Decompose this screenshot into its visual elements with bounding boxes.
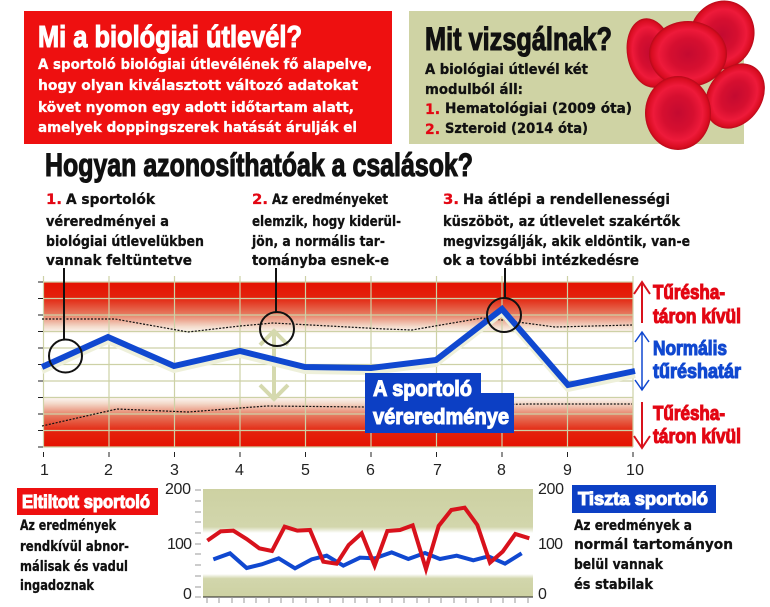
text block: banned athlete description: Az eredmények — [20, 518, 116, 534]
label: out of tolerance, lower — [653, 403, 741, 448]
label: normal tolerance: tűréshatár — [653, 361, 741, 383]
left axis labels: 0 — [183, 586, 192, 603]
text block: modules: Hematológiai (2009 óta) — [445, 101, 632, 117]
text block: step 1: A sportolók — [66, 192, 155, 208]
right axis labels: 200 — [538, 481, 564, 498]
text block: step 1: vannak feltüntetve — [46, 253, 192, 269]
heading: Mi a biológiai útlevél?: Mi a biológiai útlevél? — [38, 19, 302, 54]
text block: clean athlete description: és stabilak — [574, 577, 653, 593]
text block: clean athlete description: Az eredmények a — [574, 518, 692, 534]
x axis labels: 7 — [433, 462, 442, 479]
text block: banned athlete description — [20, 518, 129, 594]
text block: step 1: véreredményei a — [46, 214, 169, 230]
left axis labels — [165, 481, 192, 603]
text block: banned athlete description: málisak és vadul — [20, 559, 128, 575]
label: A sportoló véreredménye: véreredménye — [373, 404, 509, 429]
x axis labels: 9 — [563, 462, 572, 479]
text block: definition: A sportoló biológiai útlevélének fő alapelve, — [38, 57, 372, 73]
panel: clean athlete — [572, 485, 733, 593]
panel: clean athlete: Tiszta sportoló — [578, 489, 708, 509]
callout circle 3 — [487, 268, 521, 332]
x axis labels: 8 — [497, 462, 506, 479]
left axis labels: 200 — [165, 481, 191, 498]
text block: step 2: tományba esnek-e — [252, 253, 389, 269]
blood result line — [42, 309, 635, 389]
heading: how can cheating be identified: Hogyan azonosíthatóak a csalások? — [45, 147, 473, 183]
label: out of tolerance, lower: Tűrésha- — [653, 403, 725, 425]
line chart: athlete blood result — [38, 268, 644, 479]
clean athlete series — [213, 552, 522, 568]
text block: step 2: elemzik, hogy kiderül- — [252, 214, 401, 230]
text block: modules: 2. — [425, 122, 440, 138]
label: A sportoló véreredménye: A sportoló — [373, 376, 472, 401]
text block: banned athlete description: ingadoznak — [20, 578, 94, 594]
text block: step 3: megvizsgálják, akik eldöntik, van-e — [443, 234, 690, 250]
heading: Mit vizsgálnak?: Mit vizsgálnak? — [425, 21, 612, 57]
banned athlete series — [207, 508, 529, 569]
text block: step 1 — [46, 192, 204, 269]
panel: what do they examine — [409, 11, 744, 144]
x axis labels: 6 — [366, 462, 375, 479]
label: out of tolerance, lower: táron kívül — [653, 426, 741, 448]
right axis labels: 100 — [538, 536, 563, 553]
label: A sportoló véreredménye — [365, 373, 514, 433]
right axis labels — [538, 481, 564, 603]
icon: red blood cells — [621, 0, 770, 150]
x axis labels: 10 — [626, 462, 644, 479]
text block: modules: modulból áll: — [425, 82, 523, 98]
arrow: normal range — [260, 331, 288, 399]
text block: modules: Szteroid (2014 óta) — [445, 121, 588, 137]
text block: clean athlete description — [574, 518, 733, 593]
x axis labels: 2 — [104, 462, 113, 479]
left axis labels: 100 — [167, 536, 192, 553]
x axis labels: 3 — [170, 462, 179, 479]
upper tolerance limit — [42, 318, 632, 332]
panel: banned athlete: Eltiltott sportoló — [22, 492, 150, 512]
label: out of tolerance, upper: Tűrésha- — [653, 282, 725, 304]
text block: step 1: biológiai útlevelükben — [46, 234, 204, 250]
x axis labels: 1 — [40, 462, 49, 479]
text block: step 3: 3. — [443, 192, 459, 208]
arrow: out of tolerance, lower — [634, 402, 650, 448]
label: normal tolerance — [653, 338, 741, 383]
x axis labels — [40, 462, 644, 479]
text block: clean athlete description: belül vannak — [574, 557, 663, 573]
label: out of tolerance, upper — [653, 282, 741, 328]
text block: definition: amelyek doppingszerek hatását árulják el — [38, 120, 357, 136]
x axis labels: 5 — [301, 462, 310, 479]
text block: definition — [38, 57, 372, 136]
callout circle 2 — [260, 268, 294, 346]
mini line chart: banned vs clean athlete — [165, 481, 564, 603]
label: out of tolerance, upper: táron kívül — [653, 306, 741, 328]
right axis labels: 0 — [538, 586, 547, 603]
lower tolerance limit — [42, 404, 632, 426]
text block: modules: A biológiai útlevél két — [425, 62, 588, 78]
text block: banned athlete description: rendkívül abnor- — [20, 539, 129, 555]
panel: what is the biological passport — [24, 11, 392, 144]
text block: step 3: Ha átlépi a rendellenességi — [463, 192, 670, 208]
text block: step 3 — [443, 192, 690, 269]
text block: step 3: küszöböt, az útlevelet szakértők — [443, 214, 680, 230]
text block: step 2 — [251, 192, 401, 269]
text block: step 3: ok a további intézkedésre — [443, 253, 639, 269]
x axis labels: 4 — [235, 462, 244, 479]
text block: clean athlete description: normál tartományon — [574, 537, 733, 553]
text block: modules — [425, 62, 632, 138]
arrow: out of tolerance, upper — [634, 282, 650, 323]
text block: definition: követ nyomon egy adott időtartam alatt, — [38, 100, 354, 116]
text block: definition: hogy olyan kiválasztott változó adatokat — [38, 78, 358, 94]
label: normal tolerance: Normális — [653, 338, 727, 360]
callout circle 1 — [49, 268, 82, 372]
text block: step 2: jön, a normális tar- — [251, 234, 385, 250]
panel: banned athlete — [17, 488, 158, 594]
text block: step 2: Az eredményeket — [272, 192, 388, 208]
text block: step 2: 2. — [252, 192, 268, 208]
text block: modules: 1. — [425, 102, 440, 118]
text block: step 1: 1. — [46, 192, 62, 208]
arrow: normal tolerance — [635, 332, 649, 390]
